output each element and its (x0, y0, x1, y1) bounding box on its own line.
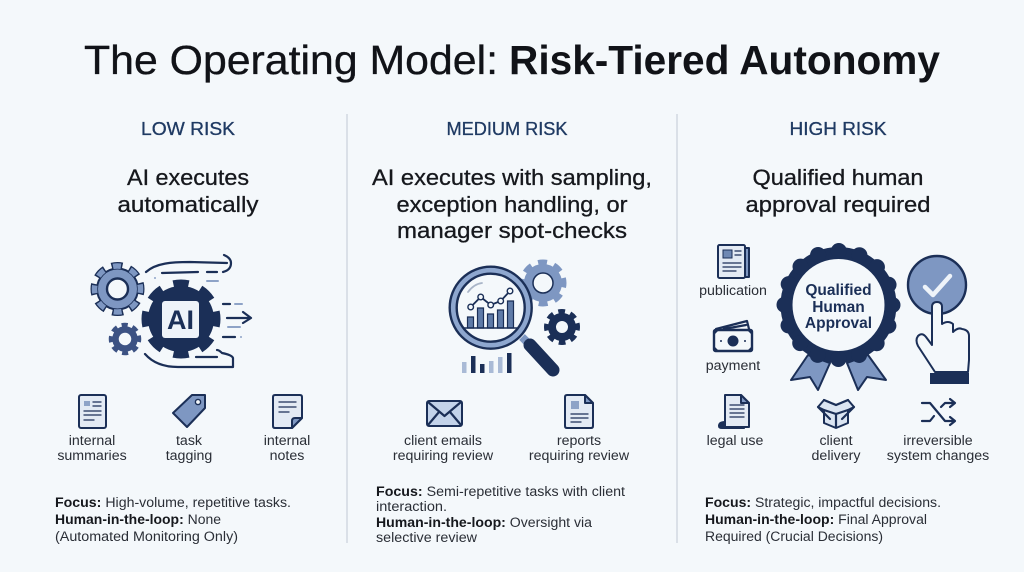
focus text: medium risk: Focus: Semi-repetitive tasks with client (376, 484, 625, 499)
focus text: high risk: Required (Crucial Decisions) (705, 529, 883, 544)
focus text: low risk: Focus: High-volume, repetitive tasks. (55, 495, 291, 510)
item: irreversible system changes: system changes (887, 448, 989, 464)
item: task tagging: tagging (166, 448, 212, 464)
icon: qualified human approval badge: Approval (805, 315, 872, 332)
focus text: medium risk: Human-in-the-loop: Oversight via (376, 515, 593, 530)
item: payment: payment (706, 358, 760, 374)
panel: high risk (699, 119, 989, 544)
focus text: medium risk: selective review (376, 530, 477, 545)
focus text: high risk (705, 495, 941, 544)
item: payment (706, 321, 760, 374)
subheading: qualified human approval required (746, 165, 930, 217)
icon: qualified human approval badge: Human (812, 299, 865, 316)
item: publication: publication (699, 283, 767, 299)
item: client emails requiring review: client emails (404, 433, 482, 449)
focus text: high risk: Focus: Strategic, impactful decisions. (705, 495, 941, 510)
item: internal notes: internal (264, 433, 310, 449)
focus text: medium risk (376, 484, 625, 545)
item: client emails requiring review: requiring review (393, 448, 494, 464)
title (84, 37, 940, 83)
item: internal notes: notes (270, 448, 304, 464)
icon: AI gears with arrows (94, 255, 251, 367)
item: client emails requiring review (393, 401, 494, 464)
item: irreversible system changes: irreversible (903, 433, 973, 449)
heading: high risk: HIGH RISK (790, 119, 886, 139)
item: task tagging (166, 395, 212, 464)
heading: low risk: LOW RISK (141, 119, 235, 139)
panel: low risk (55, 119, 310, 544)
item: legal use (707, 395, 764, 449)
subheading: AI executes automatically: automatically (118, 192, 258, 217)
item: internal summaries (57, 395, 127, 464)
item: legal use: legal use (707, 433, 764, 449)
subheading: AI executes with sampling: AI executes with sampling, (372, 165, 652, 190)
subheading: AI executes automatically (118, 165, 258, 217)
item: task tagging: task (176, 433, 203, 449)
icon: qualified human approval badge: Qualified (805, 282, 872, 299)
item: internal notes (264, 395, 310, 464)
icon: magnifier with chart and gears (450, 262, 577, 373)
icon: AI gears with arrows: AI (167, 305, 194, 335)
subheading: qualified human approval required: approval required (746, 192, 930, 217)
panel: medium risk (372, 119, 652, 545)
item: reports requiring review (529, 395, 630, 464)
item: client delivery: delivery (812, 448, 861, 464)
focus text: low risk (55, 495, 291, 544)
title: The Operating Model: (84, 37, 498, 83)
item: publication (699, 245, 767, 299)
subheading: AI executes automatically: AI executes (127, 165, 249, 190)
item: reports requiring review: requiring review (529, 448, 630, 464)
subheading: AI executes with sampling: manager spot-checks (397, 218, 627, 243)
heading: medium risk: MEDIUM RISK (446, 119, 568, 139)
item: client delivery (812, 400, 861, 464)
title: Risk-Tiered Autonomy (509, 37, 940, 83)
subheading: qualified human approval required: Qualified human (752, 165, 924, 190)
subheading: AI executes with sampling: exception handling, or (396, 192, 628, 217)
focus text: low risk: (Automated Monitoring Only) (55, 529, 238, 544)
item: client delivery: client (819, 433, 853, 449)
item: internal summaries: summaries (57, 448, 127, 464)
item: reports requiring review: reports (557, 433, 601, 449)
focus text: medium risk: interaction. (376, 499, 447, 514)
focus text: low risk: Human-in-the-loop: None (55, 512, 221, 527)
icon: qualified human approval badge (780, 247, 896, 390)
item: irreversible system changes (887, 399, 989, 464)
icon: hand pressing check button (908, 256, 969, 384)
item: internal summaries: internal (69, 433, 115, 449)
focus text: high risk: Human-in-the-loop: Final Approval (705, 512, 927, 527)
subheading: AI executes with sampling (372, 165, 652, 243)
